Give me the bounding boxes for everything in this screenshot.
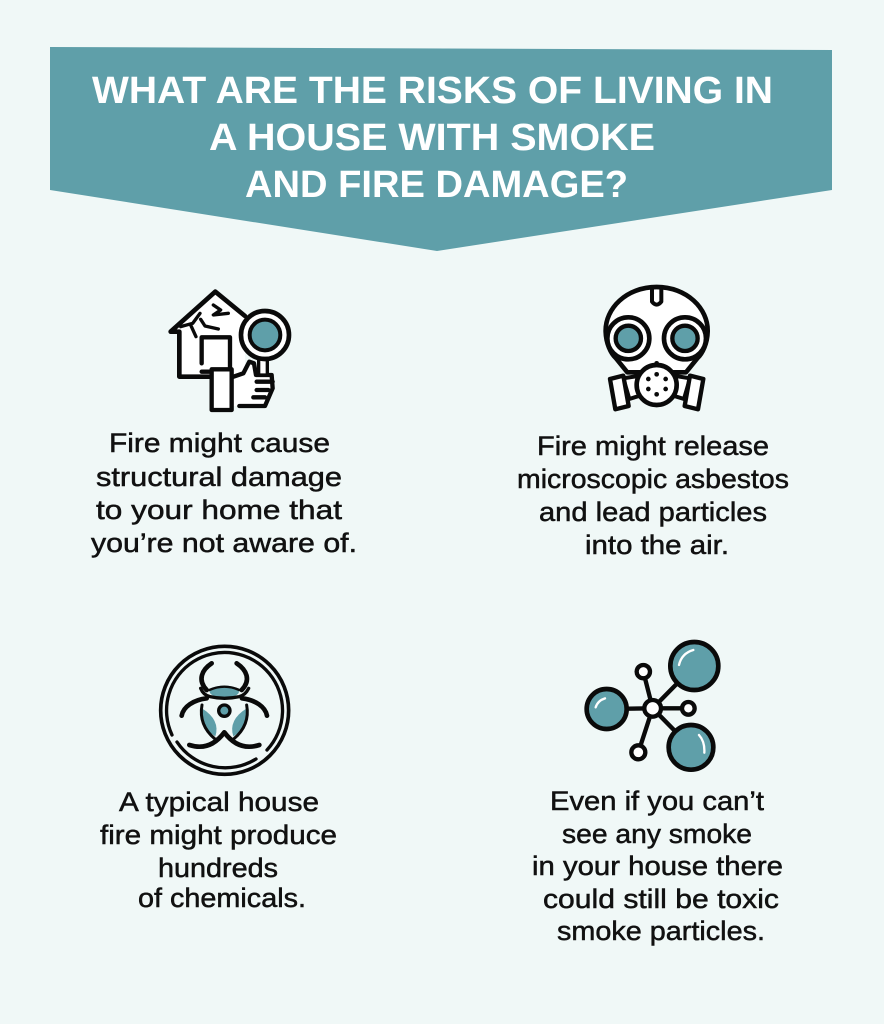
title: AND FIRE DAMAGE? bbox=[245, 164, 628, 206]
icon: smoke particle molecule bbox=[587, 642, 718, 770]
text: structural damage: you’re not aware of. bbox=[91, 528, 357, 558]
text: toxic smoke particles: could still be toxic bbox=[543, 884, 779, 914]
text: asbestos and lead: and lead particles bbox=[539, 497, 767, 527]
title: A HOUSE WITH SMOKE bbox=[209, 117, 655, 159]
title bbox=[92, 70, 773, 206]
text: toxic smoke particles: smoke particles. bbox=[557, 916, 765, 946]
icon: cracked house with magnifying glass bbox=[171, 292, 289, 410]
text: toxic smoke particles: see any smoke bbox=[562, 819, 752, 849]
text: structural damage: to your home that bbox=[96, 495, 343, 525]
text: hundreds of chemicals: fire might produce bbox=[100, 820, 337, 850]
title banner bbox=[50, 47, 832, 251]
icon: gas mask bbox=[606, 287, 708, 409]
text: asbestos and lead: into the air. bbox=[585, 530, 729, 560]
text: toxic smoke particles bbox=[532, 786, 783, 946]
text: hundreds of chemicals: A typical house bbox=[119, 787, 319, 817]
text: asbestos and lead: microscopic asbestos bbox=[517, 464, 789, 494]
icon: biohazard symbol bbox=[161, 646, 289, 774]
text: hundreds of chemicals: hundreds bbox=[158, 853, 278, 883]
text: hundreds of chemicals bbox=[100, 787, 337, 913]
text: toxic smoke particles: in your house there bbox=[532, 851, 783, 881]
title: WHAT ARE THE RISKS OF LIVING IN bbox=[92, 70, 773, 112]
text: hundreds of chemicals: of chemicals. bbox=[138, 883, 306, 913]
text: structural damage: structural damage bbox=[96, 462, 342, 492]
text: structural damage: Fire might cause bbox=[109, 428, 330, 458]
text: structural damage bbox=[91, 428, 357, 558]
text: asbestos and lead bbox=[517, 431, 789, 560]
text: asbestos and lead: Fire might release bbox=[537, 431, 769, 461]
text: toxic smoke particles: Even if you can’t bbox=[550, 786, 765, 816]
